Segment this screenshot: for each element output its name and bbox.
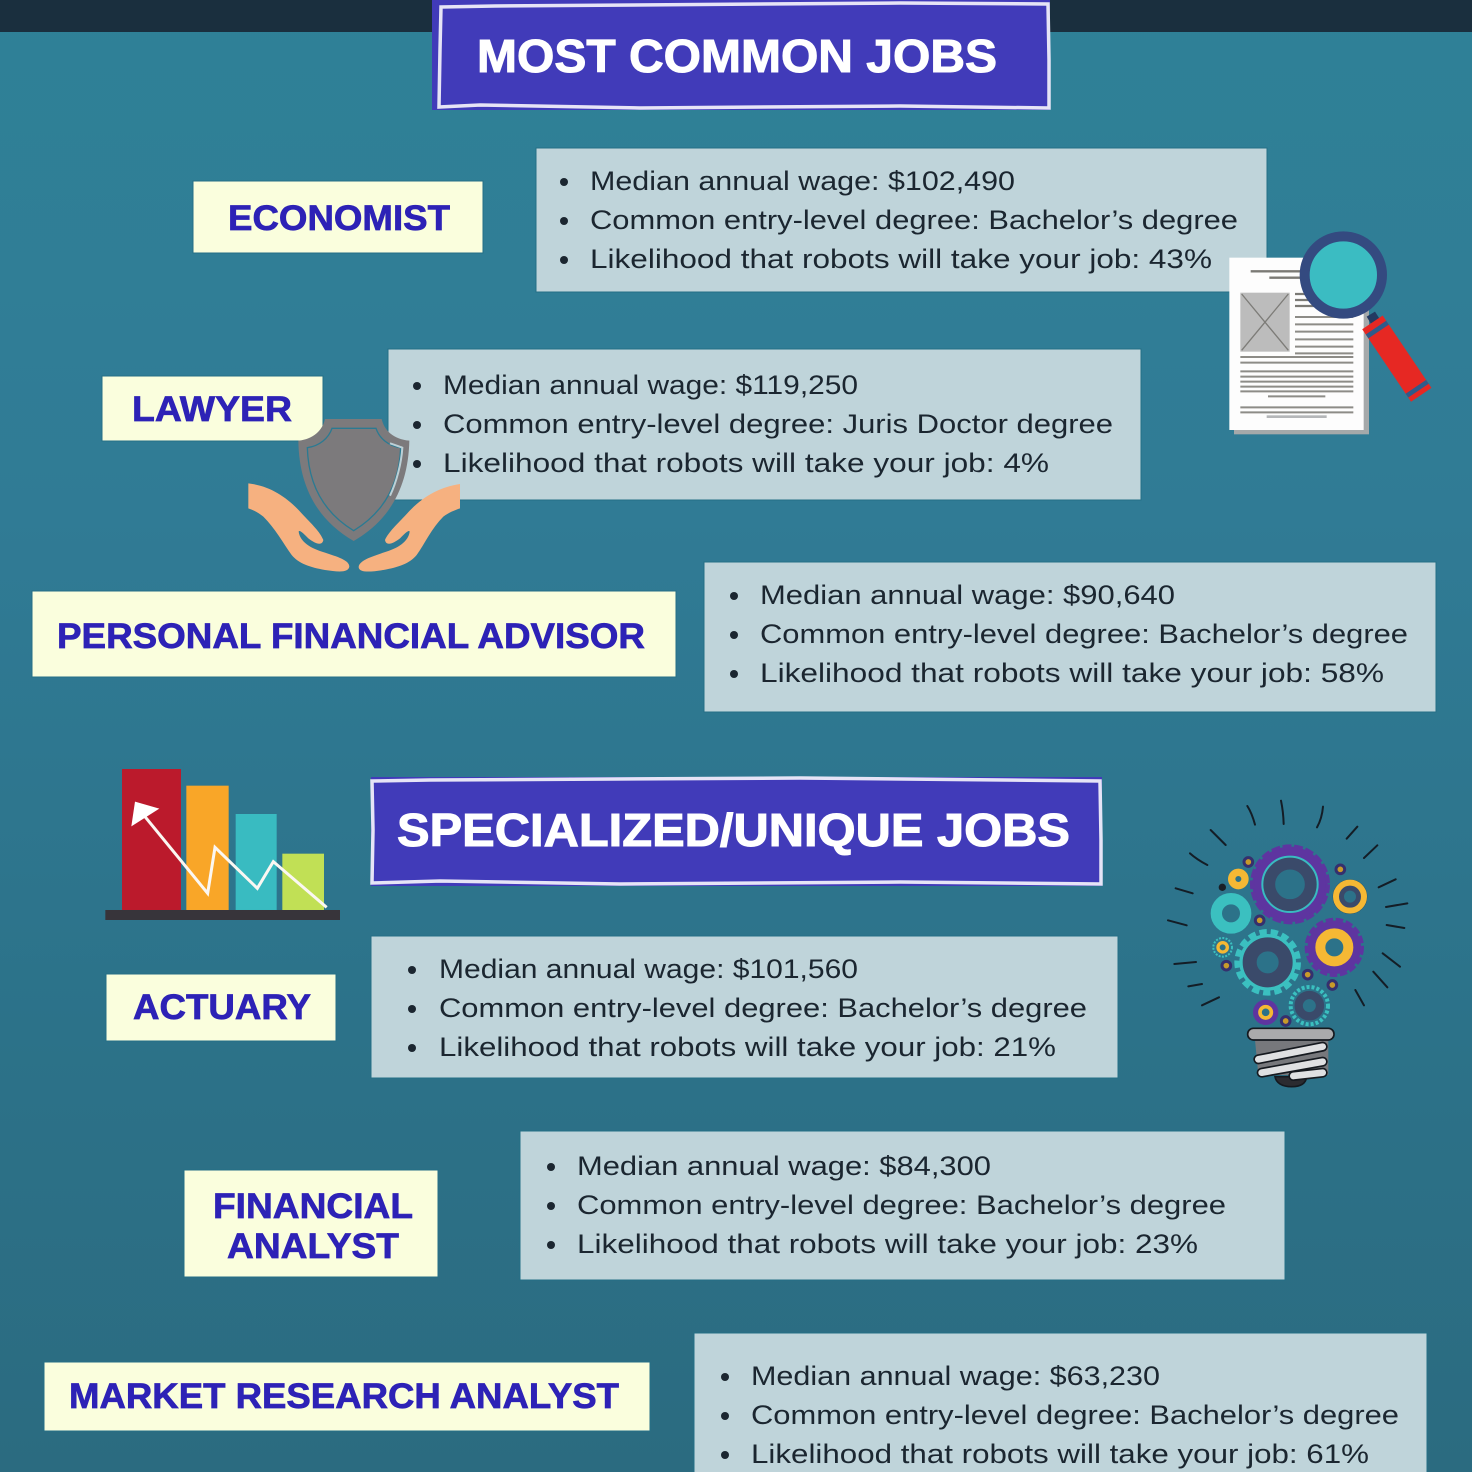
panel: financial analyst details [520,1131,1285,1280]
icon: bar chart with arrow [105,769,340,920]
gear: purple right [1307,920,1362,975]
panel: market research analyst details: Median annual wage: $63,230 [751,1361,1160,1391]
label: market research analyst [44,1362,650,1431]
panel: market research analyst details [694,1333,1427,1472]
panel: lawyer details: Likelihood that robots will take your job: 4% [443,448,1049,478]
panel: personal financial advisor details: Median annual wage: $90,640 [760,580,1175,610]
rays [1168,801,1407,1005]
panel: lawyer details: Median annual wage: $119,250 [443,370,858,400]
panel: financial analyst details: Common entry-level degree: Bachelor’s degree [577,1190,1226,1220]
label: financial analyst: FINANCIAL [213,1187,413,1226]
panel: financial analyst details: Likelihood that robots will take your job: 23% [577,1229,1198,1259]
icon: light bulb with gears [1168,801,1407,1087]
gear: small yellow [1232,872,1245,886]
panel: actuary details: Common entry-level degree: Bachelor’s degree [439,993,1087,1023]
panel: market research analyst details: Common entry-level degree: Bachelor’s degree [751,1400,1399,1430]
panel: lawyer details: Common entry-level degree: Juris Doctor degree [443,409,1113,439]
gear: yellow right [1333,880,1367,913]
label: personal financial advisor [32,591,676,677]
label: lawyer [102,376,323,441]
gear: large purple [1252,847,1328,922]
gear: mini teal [1213,938,1232,957]
label: financial analyst: ANALYST [227,1227,399,1266]
label: personal financial advisor: PERSONAL FINANCIAL ADVISOR [57,617,645,656]
mini gears [1222,858,1345,1025]
panel: personal financial advisor details [704,562,1436,712]
panel: financial analyst details: Median annual wage: $84,300 [577,1151,991,1181]
gear: small purple [1253,1000,1278,1025]
label: market research analyst: MARKET RESEARCH ANALYST [69,1377,619,1416]
panel: actuary details: Median annual wage: $101,560 [439,954,858,984]
panel: personal financial advisor details: Likelihood that robots will take your job: 58% [760,658,1384,688]
label: actuary: ACTUARY [133,988,311,1027]
panel: market research analyst details: Likelihood that robots will take your job: 61% [751,1439,1369,1469]
heading: specialized/unique jobs: SPECIALIZED/UNIQUE JOBS [397,804,1070,856]
panel: economist details: Likelihood that robots will take your job: 43% [590,244,1212,274]
gear: large teal [1237,932,1298,993]
gear: teal ring [1216,899,1246,928]
icon: shield held by hands [248,419,460,572]
label: financial analyst [184,1170,438,1277]
label: economist: ECONOMIST [228,199,450,238]
panel: actuary details [371,936,1118,1078]
heading: most common jobs [432,0,1050,110]
label: lawyer: LAWYER [132,390,292,429]
heading: specialized/unique jobs [371,777,1102,886]
panel: economist details: Common entry-level degree: Bachelor’s degree [590,205,1238,235]
bulb base [1248,1028,1334,1087]
panel: actuary details: Likelihood that robots will take your job: 21% [439,1032,1056,1062]
panel: personal financial advisor details: Common entry-level degree: Bachelor’s degree [760,619,1408,649]
label: actuary [106,974,336,1041]
panel: economist details [536,148,1267,292]
panel: lawyer details [388,349,1141,500]
gear: dotted teal [1291,987,1328,1024]
icon: document with magnifying glass [1229,236,1431,434]
panel: economist details: Median annual wage: $102,490 [590,166,1015,196]
label: economist [193,181,483,253]
heading: most common jobs: MOST COMMON JOBS [477,30,997,82]
